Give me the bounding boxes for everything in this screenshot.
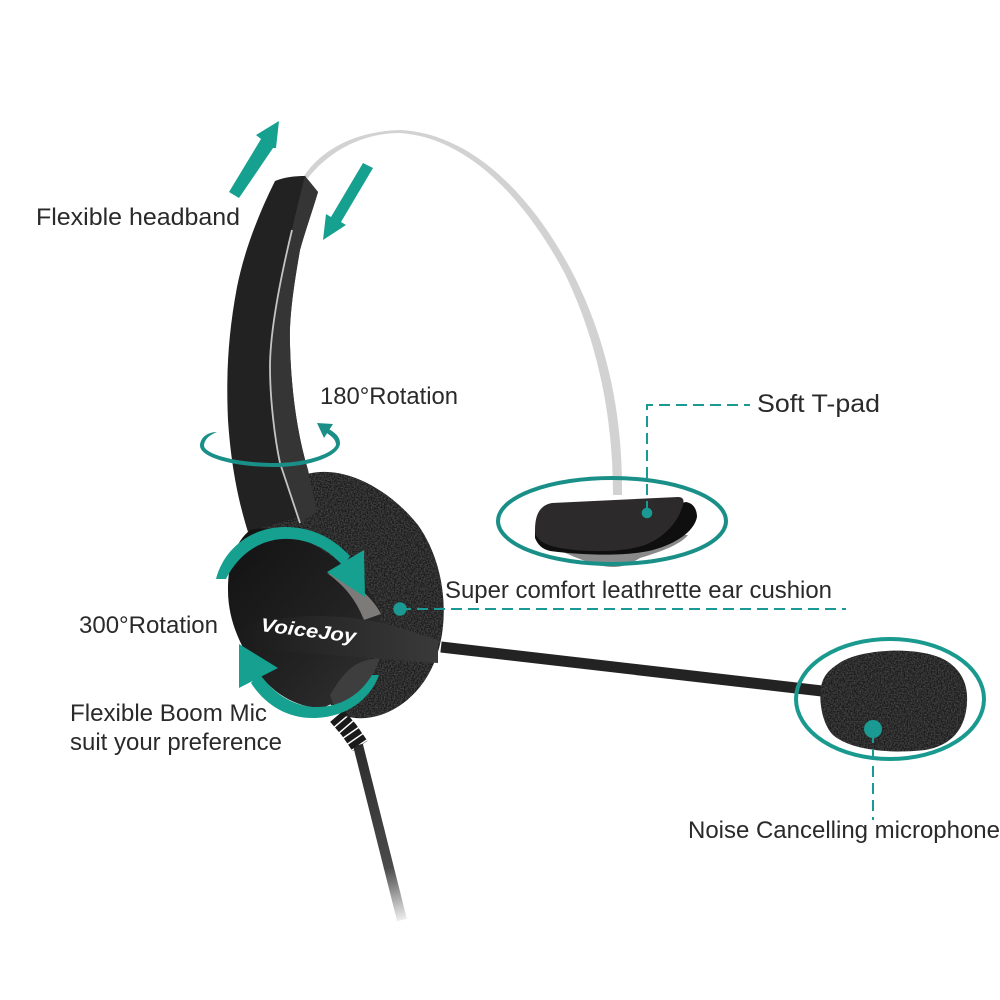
ear cushion xyxy=(238,472,444,718)
flexible headband down arrow xyxy=(323,163,373,240)
ear cushion callout line xyxy=(393,602,846,616)
300 rotation top arrow xyxy=(216,527,365,597)
earpiece housing xyxy=(228,528,382,708)
label: flexible boom mic: Flexible Boom Mic xyxy=(70,700,267,727)
label: flexible headband: Flexible headband xyxy=(36,204,240,231)
headset illustration xyxy=(227,130,967,920)
metal headband wire xyxy=(304,130,622,495)
microphone callout line xyxy=(864,720,882,820)
microphone foam xyxy=(820,651,967,751)
flexible headband arm xyxy=(227,176,318,532)
180 rotation arrow xyxy=(200,423,340,467)
T-pad callout line xyxy=(642,405,750,518)
T-pad highlight ellipse xyxy=(498,478,726,564)
flexible headband up arrow xyxy=(229,121,279,198)
microphone highlight ellipse xyxy=(796,639,984,759)
VoiceJoy logo: VoiceJoy xyxy=(259,615,359,648)
label: 180 rotation: 180°Rotation xyxy=(320,383,458,410)
label: soft T-pad: Soft T-pad xyxy=(757,390,880,418)
label: ear cushion: Super comfort leathrette ear cushion xyxy=(445,577,832,604)
label: noise cancelling microphone: Noise Cancelling microphone xyxy=(688,817,1000,844)
flexible boom xyxy=(248,616,438,663)
gooseneck xyxy=(441,647,822,691)
soft T-pad xyxy=(535,497,697,567)
coiled cable xyxy=(337,716,402,920)
label: suit your preference: suit your preference xyxy=(70,729,282,756)
300 rotation bottom arrow xyxy=(239,644,379,718)
label: 300 rotation: 300°Rotation xyxy=(79,612,218,639)
